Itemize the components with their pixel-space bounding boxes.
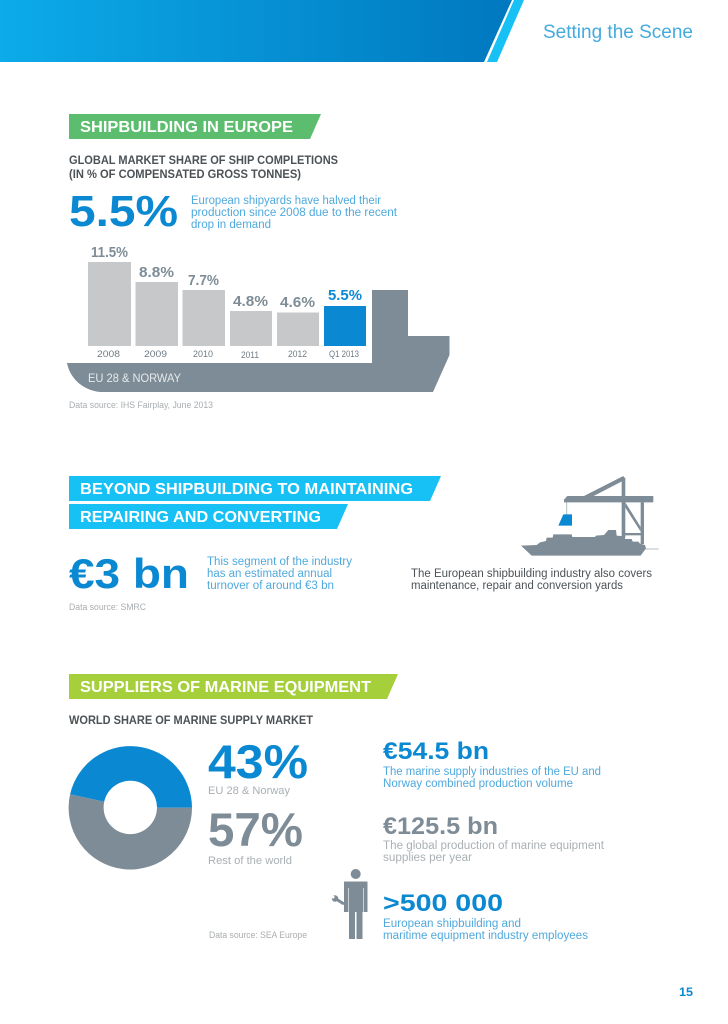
heading: beyond shipbuilding: BEYOND SHIPBUILDING TO MAINTAINING xyxy=(80,481,413,498)
bar chart: 4.6% xyxy=(280,295,315,311)
icon: ship hull xyxy=(67,290,450,392)
panel: suppliers of marine equipment xyxy=(69,674,605,942)
description text xyxy=(207,556,352,592)
bar chart: 2008 xyxy=(97,349,120,360)
bar chart: 2009 xyxy=(144,349,167,360)
stat 43%: EU 28 & Norway xyxy=(208,785,290,797)
text: repair yards: maintenance, repair and conversion yards xyxy=(411,580,623,592)
stat 54.5 bn: €54.5 bn xyxy=(383,738,489,765)
stat 500 000: European shipbuilding and xyxy=(383,918,521,930)
heading: shipbuilding in Europe xyxy=(69,114,321,139)
heading: suppliers: SUPPLIERS OF MARINE EQUIPMENT xyxy=(80,679,371,696)
description text: European shipyards have halved their xyxy=(191,195,381,207)
description text: This segment of the industry xyxy=(207,556,352,568)
key figure 5.5%: 5.5% xyxy=(69,187,178,236)
description text xyxy=(191,195,398,231)
icon: crane and ship xyxy=(521,476,659,556)
data source: Data source: SMRC xyxy=(69,602,146,612)
text: repair yards: The European shipbuilding industry also covers xyxy=(411,568,652,580)
heading: shipbuilding in Europe: SHIPBUILDING IN EUROPE xyxy=(80,119,293,136)
bar chart: Q1 2013 xyxy=(329,349,359,360)
heading: beyond shipbuilding: REPAIRING AND CONVERTING xyxy=(80,509,321,526)
stat 500 000: maritime equipment industry employees xyxy=(383,930,588,942)
description text: has an estimated annual xyxy=(207,568,332,580)
heading: suppliers xyxy=(69,674,398,699)
text: repair yards xyxy=(411,568,652,592)
panel: shipbuilding in Europe xyxy=(67,114,450,410)
bar chart: 11.5% xyxy=(91,245,128,261)
header banner xyxy=(0,0,524,62)
bar chart: 5.5% xyxy=(328,288,362,304)
stat 54.5 bn: The marine supply industries of the EU and xyxy=(383,766,601,778)
page title: Setting the Scene xyxy=(543,22,693,43)
page number: 15 xyxy=(679,985,693,999)
data source: Data source: IHS Fairplay, June 2013 xyxy=(69,400,213,410)
bar chart: 2011 xyxy=(241,350,259,361)
stat 57%: 57% xyxy=(208,803,303,856)
chart subtitle xyxy=(69,155,338,181)
heading: beyond shipbuilding xyxy=(69,476,441,529)
bar chart: 7.7% xyxy=(188,273,219,289)
stat 125.5 bn xyxy=(383,813,605,864)
panel: beyond shipbuilding xyxy=(69,476,659,612)
key figure 3 bn: €3 bn xyxy=(69,550,189,597)
description text: drop in demand xyxy=(191,219,271,231)
chart subtitle: GLOBAL MARKET SHARE OF SHIP COMPLETIONS xyxy=(69,155,338,167)
chart subtitle: (IN % OF COMPENSATED GROSS TONNES) xyxy=(69,169,301,181)
bar chart: 8.8% xyxy=(139,265,174,281)
donut chart xyxy=(69,746,192,870)
icon: worker with wrench xyxy=(330,869,368,939)
stat 125.5 bn: supplies per year xyxy=(383,852,472,864)
stat 54.5 bn xyxy=(383,738,601,790)
stat 54.5 bn: Norway combined production volume xyxy=(383,778,573,790)
stat 500 000 xyxy=(383,890,588,942)
description text: turnover of around €3 bn xyxy=(207,580,334,592)
stat 125.5 bn: €125.5 bn xyxy=(383,813,498,840)
stat 500 000: >500 000 xyxy=(383,890,503,917)
description text: production since 2008 due to the recent xyxy=(191,207,398,219)
data source: Data source: SEA Europe xyxy=(209,930,307,940)
hull label: EU 28 & NORWAY xyxy=(88,373,181,385)
stat 125.5 bn: The global production of marine equipment xyxy=(383,840,605,852)
bar chart: 2010 xyxy=(193,349,213,360)
bar chart: 2012 xyxy=(288,349,307,360)
stat 43%: 43% xyxy=(208,735,308,788)
bar chart: 4.8% xyxy=(233,294,268,310)
stat 57%: Rest of the world xyxy=(208,855,292,867)
bar chart xyxy=(88,245,366,361)
chart subtitle: WORLD SHARE OF MARINE SUPPLY MARKET xyxy=(69,715,313,727)
